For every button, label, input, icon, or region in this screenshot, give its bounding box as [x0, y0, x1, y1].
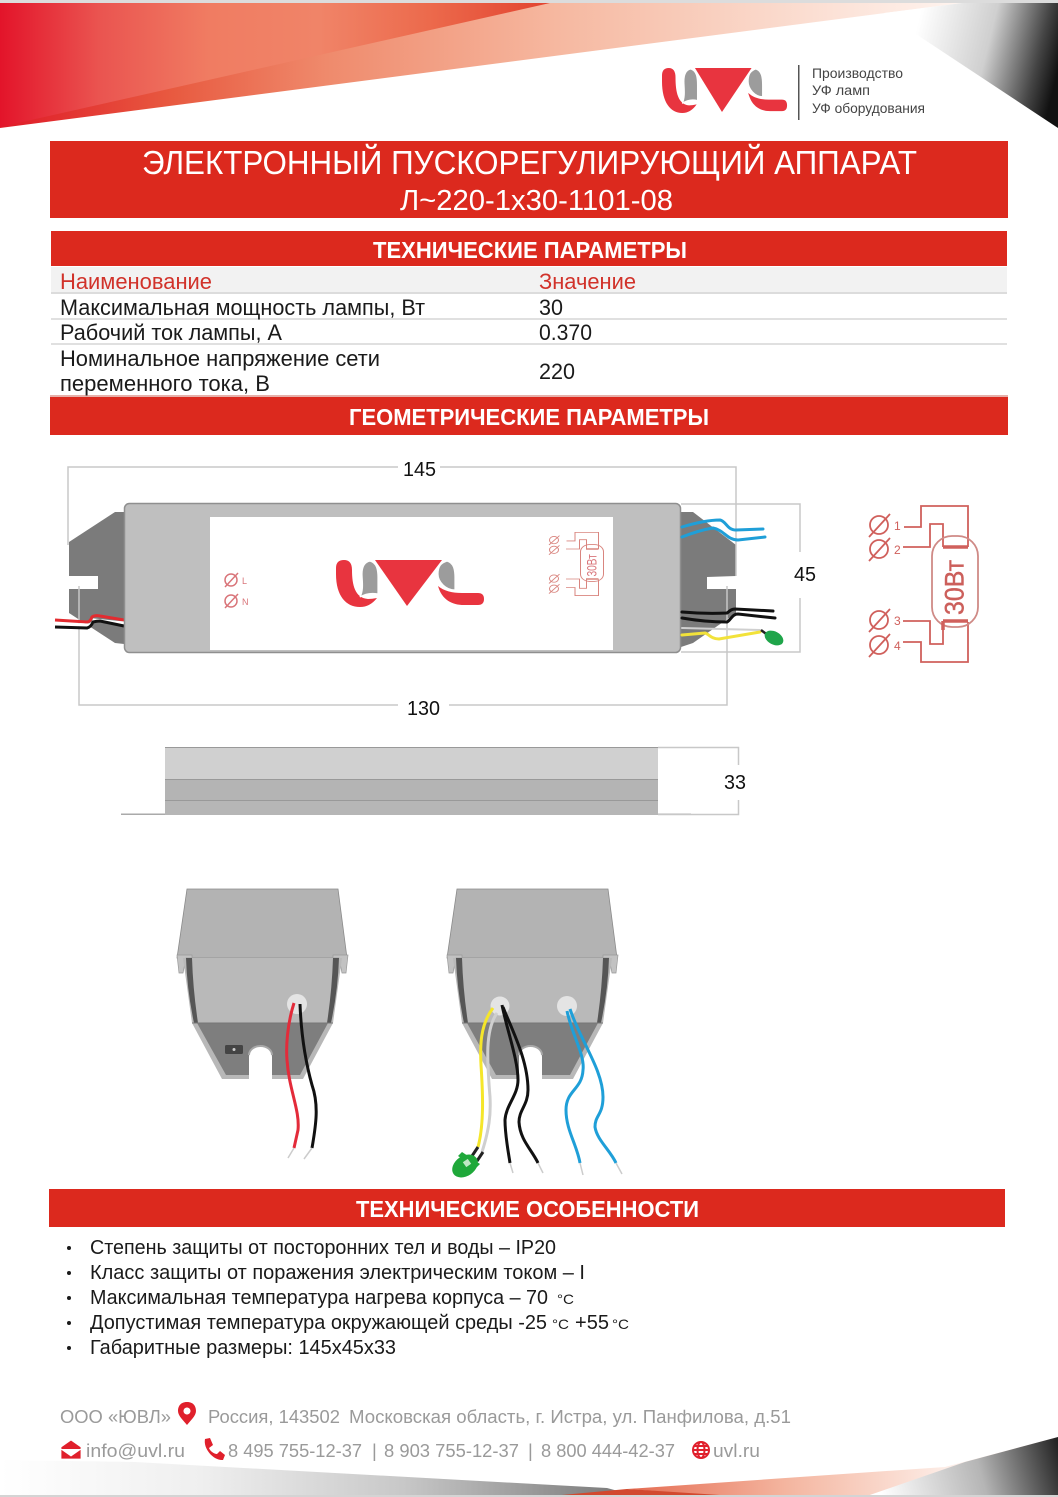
contacts row: info@uvl.ru [86, 1440, 185, 1461]
features list: Допустимая температура окружающей среды -25 [90, 1312, 547, 1334]
housing body [124, 504, 680, 652]
end view: input side [177, 889, 348, 1159]
company address: Московская область, г. Истра, ул. Панфилова, д.51 [349, 1406, 791, 1427]
bottom decorative banner [0, 1437, 1058, 1497]
section heading: geometric parameters [50, 397, 1008, 435]
logo tagline: УФ оборудования [812, 101, 925, 116]
contacts row [61, 1438, 760, 1461]
dimension: 130: 130 [407, 698, 440, 720]
section heading: technical features [49, 1189, 1005, 1227]
features list: Степень защиты от посторонних тел и воды – IP20 [90, 1237, 556, 1259]
dimension: 33: 33 [724, 772, 746, 794]
top view drawing of ballast [55, 459, 816, 720]
parameters table: Наименование [60, 269, 212, 294]
icon: location pin [178, 1402, 196, 1425]
parameters table: 30 [539, 295, 563, 320]
contacts row: | [528, 1440, 533, 1461]
small wiring diagram on label: 30Вт [584, 554, 600, 577]
dimension: 45: 45 [794, 564, 816, 586]
left input wires [55, 616, 124, 628]
L and N terminals: N [242, 597, 248, 607]
wiring diagram: 4 [894, 639, 901, 653]
features list: °C [612, 1316, 629, 1332]
company address: Россия, 143502 [208, 1406, 340, 1427]
contacts row: 8 800 444-42-37 [541, 1440, 675, 1461]
wiring diagram: 30Вт [940, 560, 970, 615]
logo: UVL company [662, 68, 787, 113]
parameters table: переменного тока, В [60, 371, 270, 396]
features list: +55 [575, 1312, 609, 1334]
logo tagline [798, 65, 925, 120]
company address [60, 1402, 791, 1427]
title band: Л~220-1x30-1101-08 [400, 185, 673, 217]
section heading: geometric parameters: ГЕОМЕТРИЧЕСКИЕ ПАРАМЕТРЫ [349, 404, 709, 430]
contacts row: 8 903 755-12-37 [384, 1440, 519, 1461]
contacts row: 8 495 755-12-37 [228, 1440, 362, 1461]
label logo UVL [336, 560, 484, 607]
parameters table: Максимальная мощность лампы, Вт [60, 295, 425, 320]
left mounting ear [69, 512, 124, 644]
right mounting ear [681, 512, 736, 647]
dimension lines [68, 467, 800, 705]
logo tagline: УФ ламп [812, 83, 870, 98]
icon: envelope [61, 1440, 81, 1459]
green LED [761, 628, 786, 648]
icon: globe [693, 1442, 709, 1458]
end view: output side [447, 889, 622, 1182]
green LED [448, 1147, 483, 1182]
logo tagline: Производство [812, 66, 903, 81]
parameters table: Значение [539, 269, 636, 294]
L and N terminals [225, 573, 248, 608]
parameters table: 220 [539, 359, 575, 384]
side view drawing [121, 747, 746, 815]
icon: phone [205, 1438, 225, 1460]
wiring diagram: 2 [894, 543, 901, 557]
small wiring diagram on label [549, 532, 604, 596]
features list [67, 1237, 629, 1359]
features list: Класс защиты от поражения электрическим током – I [90, 1262, 585, 1284]
right output wires [682, 520, 775, 639]
section heading: technical parameters: ТЕХНИЧЕСКИЕ ПАРАМЕТРЫ [373, 237, 687, 263]
features list: Габаритные размеры: 145х45х33 [90, 1337, 396, 1359]
title band: ЭЛЕКТРОННЫЙ ПУСКОРЕГУЛИРУЮЩИЙ АППАРАТ [142, 144, 917, 181]
wiring diagram: 3 [894, 614, 901, 628]
company address: ООО «ЮВЛ» [60, 1406, 171, 1427]
features list: °C [557, 1291, 574, 1307]
wiring diagram [869, 506, 978, 662]
parameters table: Рабочий ток лампы, А [60, 320, 282, 345]
features list: Максимальная температура нагрева корпуса – 70 [90, 1287, 548, 1309]
contacts row: | [372, 1440, 377, 1461]
parameters table: Номинальное напряжение сети [60, 346, 380, 371]
white label [210, 517, 613, 650]
contacts row: uvl.ru [713, 1440, 760, 1461]
features list: °C [552, 1316, 569, 1332]
dimension: 145: 145 [403, 459, 436, 481]
section heading: technical features: ТЕХНИЧЕСКИЕ ОСОБЕННОСТИ [356, 1196, 699, 1222]
title band [50, 141, 1008, 218]
section heading: technical parameters [51, 231, 1007, 266]
parameters table: 0.370 [539, 320, 592, 345]
L and N terminals: L [242, 576, 247, 586]
top decorative banner [0, 0, 1058, 128]
parameters table [50, 267, 1008, 397]
wiring diagram: 1 [894, 519, 901, 533]
